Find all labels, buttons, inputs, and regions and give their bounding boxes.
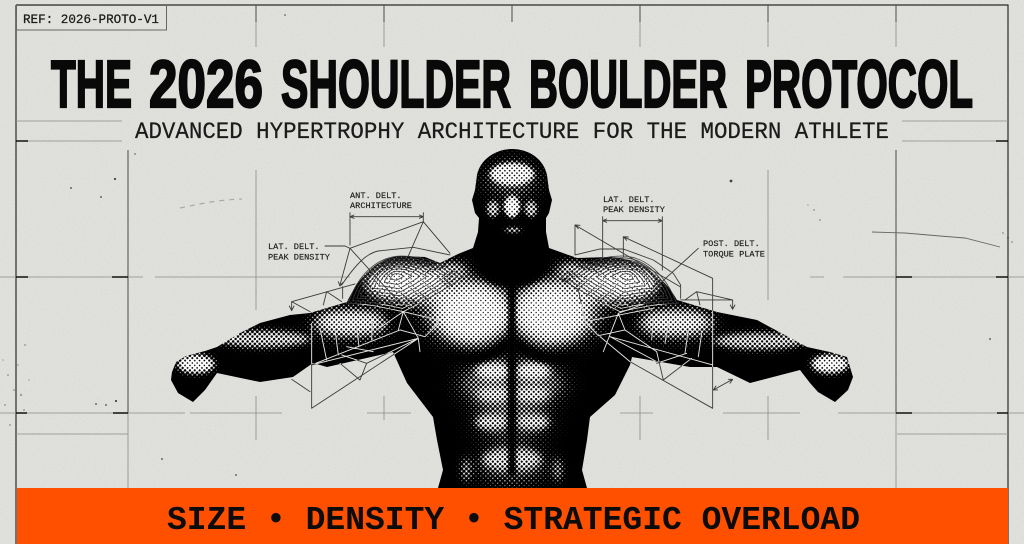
wireframe highlight on body	[311, 304, 714, 367]
label: anterior deltoid: ARCHITECTURE	[350, 201, 412, 211]
reference tag: REF: 2026-PROTO-V1	[23, 13, 159, 27]
title	[51, 47, 973, 122]
halftone screen	[172, 149, 851, 488]
label: posterior deltoid: POST. DELT.	[703, 239, 760, 249]
muscle highlights	[176, 329, 850, 484]
bottom banner	[17, 488, 1008, 544]
reference tag	[16, 6, 166, 30]
facial highlights	[486, 163, 538, 232]
subtitle: ADVANCED HYPERTROPHY ARCHITECTURE FOR THE MODERN ATHLETE	[135, 119, 889, 146]
label: lateral deltoid right: LAT. DELT.	[603, 195, 655, 205]
halftone mid-tone halos	[306, 158, 720, 486]
figure: halftone bodybuilder	[171, 149, 853, 488]
broad torso and arm tones	[314, 262, 712, 341]
label: anterior deltoid: ANT. DELT.	[350, 191, 402, 201]
wireframe overlay: right shoulder	[560, 217, 735, 408]
label: posterior deltoid: TORQUE PLATE	[703, 250, 765, 260]
title: 2026	[149, 47, 263, 122]
title: BOULDER	[529, 47, 727, 122]
sternum, neck and muscle shadows	[445, 238, 579, 475]
wireframe overlay: left shoulder	[289, 213, 463, 408]
bottom banner: SIZE • DENSITY • STRATEGIC OVERLOAD	[167, 502, 860, 539]
label: lateral deltoid right: PEAK DENSITY	[603, 205, 665, 215]
label: lateral deltoid left: LAT. DELT.	[268, 242, 320, 252]
title: SHOULDER	[281, 47, 511, 122]
title: THE	[51, 47, 132, 122]
label: lateral deltoid left: PEAK DENSITY	[268, 252, 330, 262]
